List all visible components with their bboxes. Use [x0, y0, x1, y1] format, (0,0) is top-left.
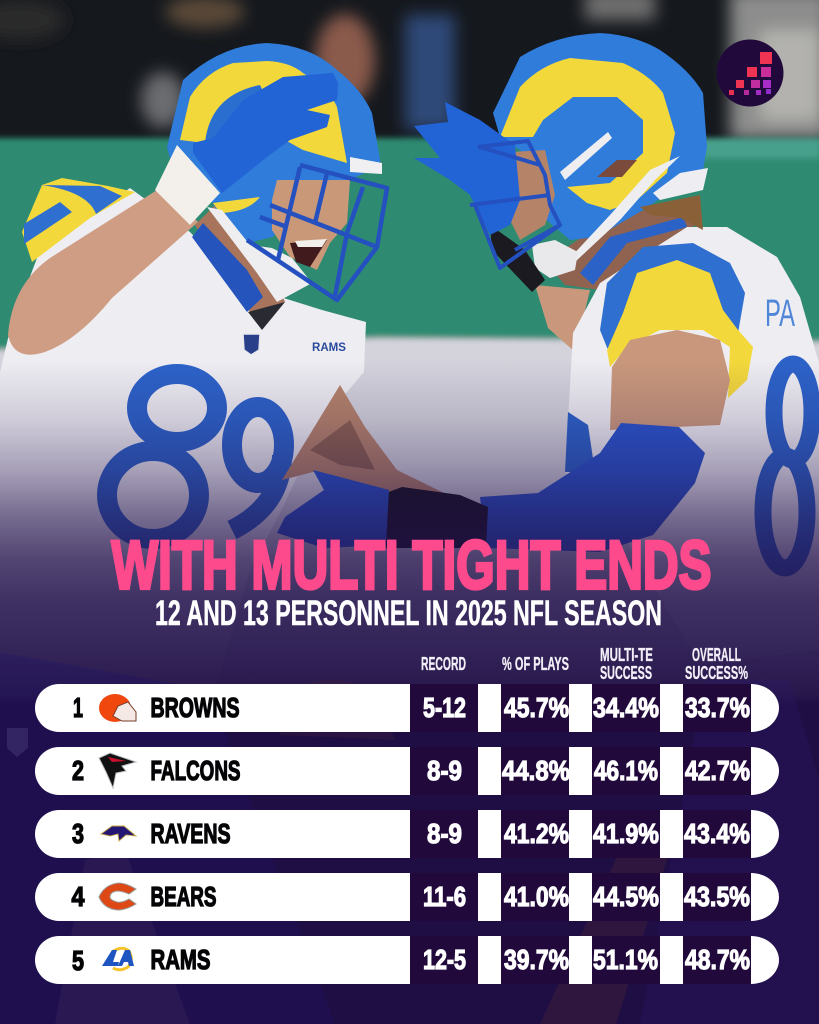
row 4: Bears: BEARS: [150, 881, 216, 912]
left player face: [272, 180, 350, 270]
left helmet cheek yellow: [213, 197, 260, 213]
column headers: [421, 645, 748, 683]
left player neck: [195, 205, 285, 312]
column headers: SUCCESS: [600, 663, 652, 683]
NFL shield: [243, 334, 260, 355]
row 5: Rams: 5: [72, 945, 84, 976]
column headers: RECORD: [421, 654, 466, 674]
left player jersey: [0, 188, 366, 690]
right player jersey: [565, 227, 819, 665]
right player sleeve: [480, 423, 705, 552]
row 2: Falcons: 46.1%: [594, 755, 658, 786]
row 1: Browns: 45.7%: [504, 692, 569, 723]
row 2: Falcons: 8-9: [427, 755, 462, 786]
left player forearm tattoo: [282, 385, 444, 493]
row 4: Bears: 44.5%: [593, 881, 659, 912]
row 1: Browns: BROWNS: [150, 692, 240, 723]
right player glove: [414, 102, 520, 235]
row 5: Rams: 51.1%: [593, 944, 658, 975]
row 4: Bears: 43.5%: [684, 881, 750, 912]
row 4: Bears: 11-6: [423, 881, 466, 912]
right player helmet: [493, 33, 708, 278]
row 5: Rams: [35, 936, 779, 984]
row 2: Falcons: 2: [72, 755, 84, 786]
row 1: Browns: 33.7%: [685, 692, 750, 723]
icon: Ravens logo: [101, 826, 136, 841]
facemask: [247, 165, 387, 300]
row 3: Ravens: 41.2%: [504, 818, 569, 849]
column headers: MULTI-TE: [600, 645, 653, 665]
row 3: Ravens: RAVENS: [150, 818, 230, 849]
row 1: Browns: 1: [73, 692, 83, 723]
left helmet horn: [180, 61, 347, 163]
row 2: Falcons: 44.8%: [502, 755, 570, 786]
right player chin pad: [532, 240, 578, 278]
photo: right player: [277, 33, 819, 665]
icon: Falcons logo: [99, 753, 136, 788]
row 5: Rams: RAMS: [150, 944, 210, 975]
row 3: Ravens: 43.4%: [684, 818, 750, 849]
icon: Browns helmet: [99, 694, 136, 722]
right player face: [505, 150, 555, 240]
row 1: Browns: 34.4%: [593, 692, 659, 723]
row 4: Bears: 4: [72, 881, 85, 912]
ear hole: [597, 160, 637, 177]
row 5: Rams: 12-5: [423, 944, 466, 975]
chin strap: [207, 207, 312, 302]
right player facemask: [470, 141, 560, 268]
column headers: % OF PLAYS: [502, 654, 569, 674]
row 2: Falcons: [35, 747, 779, 795]
row 3: Ravens: 41.9%: [593, 818, 659, 849]
right player shoulder yellow: [607, 260, 753, 398]
lower glove: [277, 470, 389, 548]
row 3: Ravens: 3: [72, 818, 84, 849]
column headers: OVERALL: [692, 645, 741, 665]
right player bicep: [610, 330, 730, 430]
photo: left player: [0, 43, 387, 690]
faded lower body shapes: [0, 652, 819, 1024]
right player neck: [545, 205, 695, 290]
column headers: SUCCESS%: [685, 663, 748, 683]
right player number: [763, 364, 812, 568]
row 5: Rams: 48.7%: [685, 944, 750, 975]
back name: PA: [765, 293, 795, 335]
row 2: Falcons: 42.7%: [685, 755, 750, 786]
wrist wrap: [386, 487, 488, 548]
right player hair: [640, 195, 703, 230]
row 4: Bears: 41.0%: [504, 881, 569, 912]
jersey wordmark: RAMS: [312, 340, 346, 354]
left player number 89: [107, 374, 284, 539]
visor bumper: [350, 157, 382, 174]
helmet rear pad: [653, 168, 708, 200]
right player collar: [580, 217, 687, 285]
left player wristband: [155, 145, 220, 225]
row 1: Browns: 5-12: [423, 692, 466, 723]
right helmet horn: [500, 58, 675, 210]
row 1: Browns: [35, 684, 779, 732]
row 5: Rams: 39.7%: [504, 944, 569, 975]
left player shoulder patch: [22, 178, 135, 262]
row 4: Bears: [35, 873, 779, 921]
left player neck collar: [192, 223, 263, 312]
right player black sleeve: [490, 225, 545, 292]
right player shoulder blue: [600, 243, 745, 350]
icon: Bears logo: [99, 883, 136, 910]
dark gradient overlay: [0, 360, 819, 1024]
right helmet stripe: [560, 132, 612, 180]
left player arm: [8, 185, 198, 355]
row 3: Ravens: [35, 810, 779, 858]
brand logo: [716, 40, 784, 106]
helmet strap: [570, 156, 680, 262]
icon: Rams logo: [102, 948, 134, 970]
left player glove: [193, 73, 338, 193]
right player far arm: [535, 285, 590, 352]
row 3: Ravens: 8-9: [427, 818, 462, 849]
row 2: Falcons: FALCONS: [150, 755, 240, 786]
left player helmet: [167, 43, 387, 302]
